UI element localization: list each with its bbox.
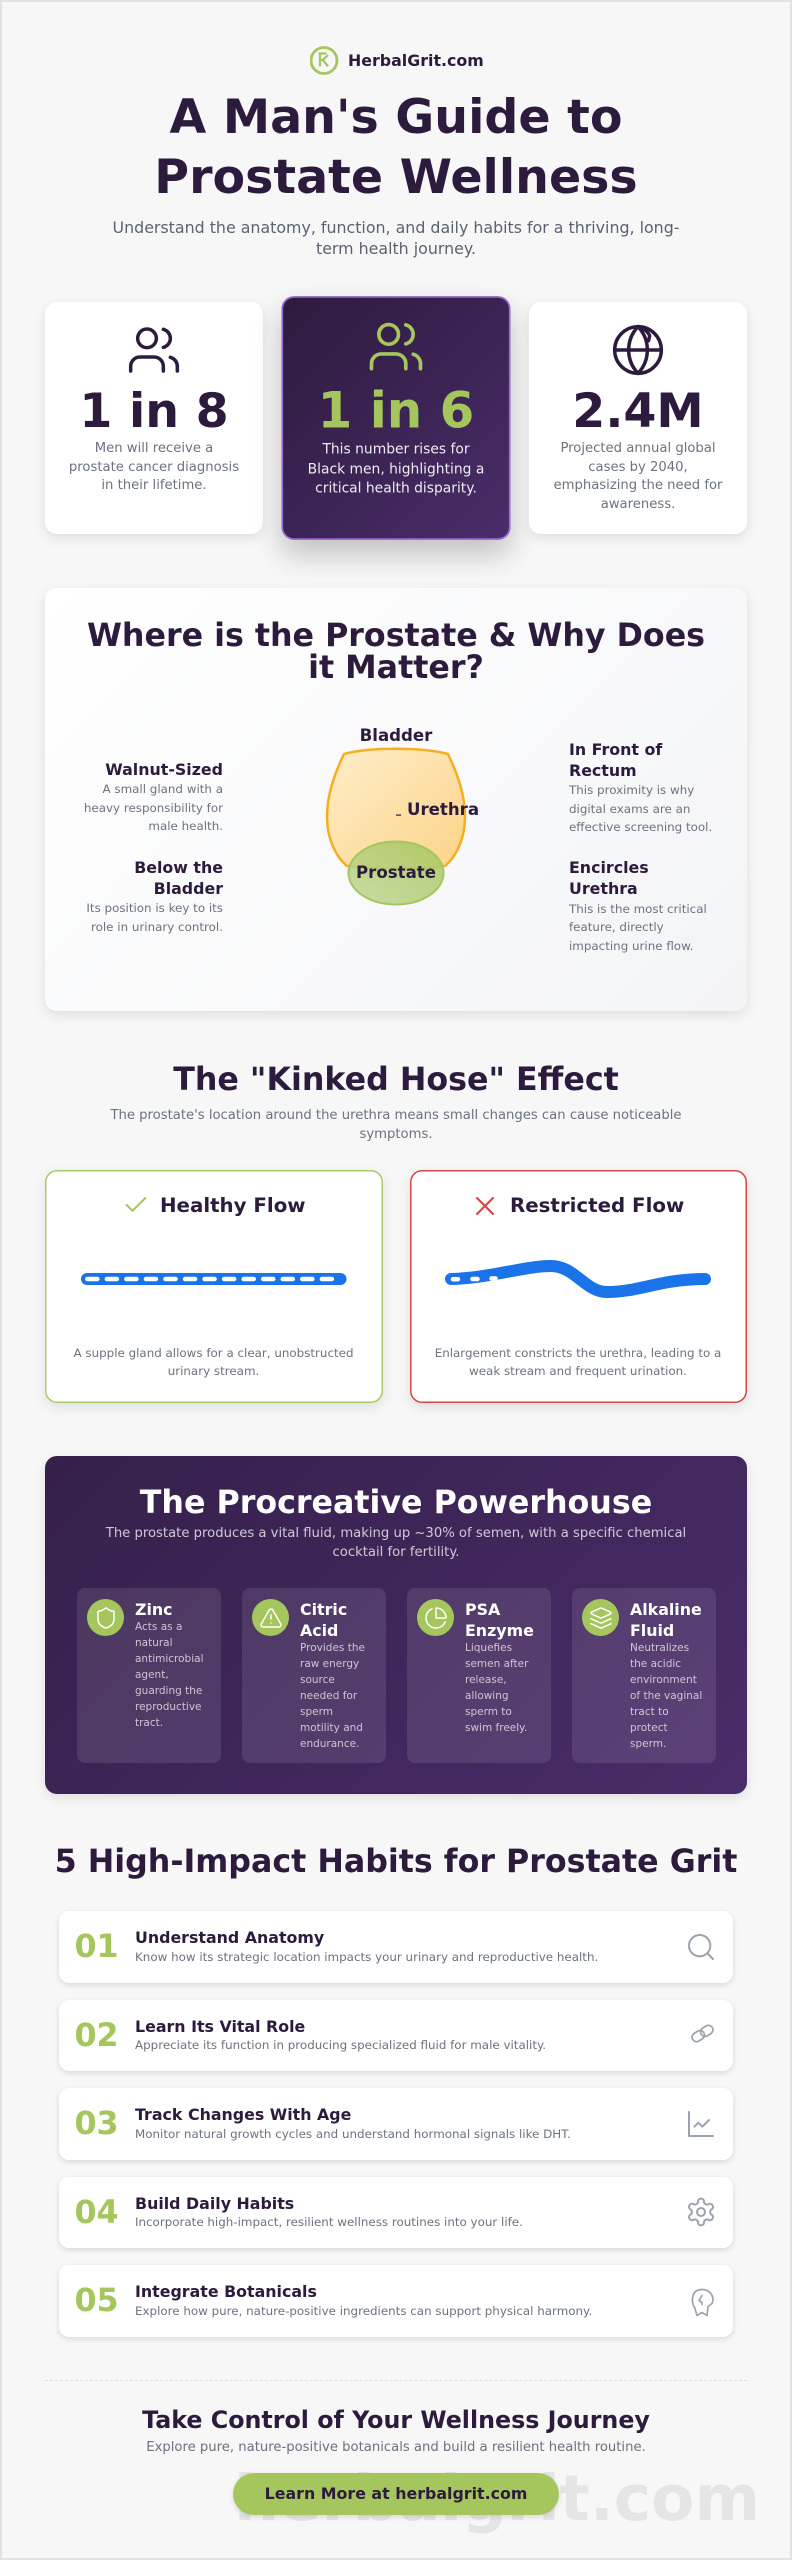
card text: source — [300, 1674, 335, 1686]
icon: users — [370, 322, 422, 370]
card title: Alkaline — [630, 1600, 702, 1619]
kinked flow line — [445, 1260, 711, 1298]
heading — [87, 618, 705, 686]
stat description: This number rises for — [322, 442, 470, 458]
card title: Citric — [300, 1600, 347, 1619]
icon: head — [692, 2288, 714, 2316]
card text: tract. — [135, 1717, 163, 1729]
subtitle: cocktail for fertility. — [333, 1545, 459, 1560]
fact: encircles urethra — [568, 858, 707, 953]
subtitle — [106, 1526, 686, 1560]
stat number: 1 in 8 — [79, 384, 229, 439]
flow line — [81, 1273, 346, 1285]
card text: motility and — [300, 1722, 363, 1734]
panel: healthy flow — [45, 1170, 382, 1403]
card text: the acidic — [630, 1658, 681, 1670]
button: Learn More at herbalgrit.com — [265, 2484, 527, 2503]
habit text: Monitor natural growth cycles and understand hormonal signals like DHT. — [135, 2127, 571, 2141]
number: 02 — [74, 2018, 119, 2054]
card text: Provides the — [300, 1642, 365, 1654]
card text: raw energy — [300, 1658, 359, 1670]
stat card: 2.4M — [529, 302, 747, 534]
habit text: Explore how pure, nature-positive ingredients can support physical harmony. — [135, 2304, 592, 2318]
panel: restricted flow — [410, 1170, 747, 1403]
number: 03 — [74, 2106, 119, 2142]
habit 05 — [59, 2265, 733, 2336]
fact: in front of rectum: In Front of — [569, 740, 662, 759]
habit text: Incorporate high-impact, resilient wellness routines into your life. — [135, 2215, 523, 2229]
habit text: Appreciate its function in producing specialized fluid for male vitality. — [135, 2038, 546, 2052]
card: citric acid — [242, 1588, 386, 1763]
label: prostate: Prostate — [356, 863, 436, 882]
stat description: awareness. — [601, 497, 675, 512]
stat card: 1 in 8 — [45, 302, 263, 534]
number: 05 — [74, 2283, 119, 2319]
stat number: 1 in 6 — [318, 382, 474, 440]
logo — [310, 46, 484, 75]
stat description: prostate cancer diagnosis — [69, 460, 239, 475]
stat description: emphasizing the need for — [554, 478, 722, 493]
title: Prostate Wellness — [154, 150, 638, 205]
fact: in front of rectum — [568, 740, 712, 834]
icon: HerbalGrit mark — [310, 46, 338, 75]
icon: line chart — [688, 2111, 714, 2137]
title — [154, 90, 638, 205]
card: psa enzyme — [406, 1588, 550, 1763]
stat number: 2.4M — [572, 384, 704, 439]
icon: search — [688, 1934, 714, 1960]
panel: where is the prostate — [45, 588, 747, 1011]
stat description: Black men, highlighting a — [308, 462, 484, 478]
stat description: critical health disparity. — [315, 481, 477, 497]
stat description — [554, 441, 722, 512]
habit title: Integrate Botanicals — [135, 2282, 317, 2301]
description — [435, 1346, 721, 1378]
stat description — [308, 442, 484, 497]
heading: The Procreative Powerhouse — [140, 1485, 652, 1521]
call to action text: Explore pure, nature-positive botanicals and build a resilient health routine. — [146, 2440, 646, 2455]
card: zinc — [76, 1588, 220, 1763]
stat description: cases by 2040, — [588, 460, 688, 475]
fact: below the bladder: Bladder — [154, 879, 223, 898]
fact text — [568, 902, 707, 953]
description: urinary stream. — [168, 1364, 259, 1378]
card text: Acts as a — [135, 1621, 182, 1633]
card text: tract to — [630, 1706, 669, 1718]
icon: users — [128, 327, 180, 373]
fact text: impacting urine flow. — [569, 939, 693, 953]
habit title: Track Changes With Age — [135, 2105, 351, 2124]
icon: gear — [688, 2198, 714, 2226]
card text: swim freely. — [465, 1722, 527, 1734]
icon: linked pills — [691, 2024, 714, 2043]
card title: Acid — [300, 1621, 338, 1640]
subtitle: Understand the anatomy, function, and daily habits for a thriving, long- — [113, 218, 679, 237]
button — [233, 2473, 559, 2515]
label: urethra: Urethra — [407, 800, 479, 819]
fact text: male health. — [148, 819, 223, 833]
kinked hose subtitle: symptoms. — [359, 1127, 433, 1142]
card text: reproductive — [135, 1701, 202, 1713]
card text: guarding the — [135, 1685, 202, 1697]
description: A supple gland allows for a clear, unobstructed — [74, 1346, 353, 1360]
fact text — [84, 782, 223, 833]
icon: triangle alert — [252, 1599, 289, 1636]
description — [74, 1346, 353, 1378]
habit title: Learn Its Vital Role — [135, 2016, 305, 2036]
fact text: feature, directly — [569, 920, 664, 934]
card text — [465, 1642, 528, 1734]
title: A Man's Guide to — [170, 90, 622, 145]
card text — [135, 1621, 204, 1729]
heading: Where is the Prostate & Why Does — [87, 618, 705, 654]
card title: Enzyme — [465, 1621, 534, 1640]
card text: needed for — [300, 1690, 357, 1702]
card text: semen after — [465, 1658, 528, 1670]
heading: it Matter? — [308, 650, 484, 686]
icon: globe — [612, 324, 664, 376]
fact: encircles urethra: Urethra — [569, 879, 638, 898]
card text: release, — [465, 1674, 507, 1686]
icon: check — [126, 1197, 146, 1212]
card title — [630, 1600, 702, 1640]
stat description: Men will receive a — [95, 441, 213, 456]
card text: Neutralizes — [630, 1642, 689, 1654]
habit 02 — [59, 2000, 733, 2071]
habit text: Know how its strategic location impacts your urinary and reproductive health. — [135, 1950, 598, 1964]
stat description: Projected annual global — [560, 441, 716, 456]
heading: Healthy Flow — [160, 1194, 306, 1217]
fact text: effective screening tool. — [569, 820, 712, 834]
card title: Fluid — [630, 1621, 674, 1640]
card text: allowing — [465, 1690, 509, 1702]
fact text — [86, 901, 223, 934]
icon: x — [476, 1196, 494, 1216]
fact text: A small gland with a — [102, 782, 223, 796]
fact text: role in urinary control. — [91, 920, 223, 934]
panel: procreative powerhouse — [45, 1456, 747, 1794]
card title — [465, 1600, 534, 1640]
icon: pie chart — [417, 1599, 454, 1636]
habit 03 — [59, 2088, 733, 2160]
description: weak stream and frequent urination. — [469, 1364, 687, 1378]
icon: shield — [87, 1599, 124, 1636]
card text: sperm. — [630, 1738, 666, 1750]
subtitle: term health journey. — [316, 239, 476, 258]
card text: antimicrobial — [135, 1653, 204, 1665]
brand name: HerbalGrit.com — [348, 51, 484, 70]
card text: of the vaginal — [630, 1690, 702, 1702]
fact text: This is the most critical — [569, 902, 707, 916]
heading: Restricted Flow — [510, 1194, 684, 1217]
card text: environment — [630, 1674, 697, 1686]
card text — [630, 1642, 702, 1750]
stat card: 1 in 6 highlighted — [282, 296, 510, 540]
card title — [300, 1600, 347, 1640]
kinked hose subtitle — [110, 1108, 682, 1142]
heading: kinked hose: The "Kinked Hose" Effect — [173, 1062, 619, 1098]
label: bladder: Bladder — [360, 726, 432, 745]
icon: layers — [582, 1599, 619, 1636]
fact: encircles urethra: Encircles — [569, 858, 649, 877]
fact text: heavy responsibility for — [84, 801, 223, 815]
card text: Liquefies — [465, 1642, 512, 1654]
card text: sperm to — [465, 1706, 512, 1718]
heading: habits: 5 High-Impact Habits for Prostate Grit — [55, 1844, 737, 1880]
fact: walnut-sized: Walnut-Sized — [105, 760, 223, 779]
card text: protect — [630, 1722, 668, 1734]
number: 01 — [74, 1929, 119, 1965]
card text — [300, 1642, 365, 1750]
fact: walnut-sized — [84, 760, 223, 833]
card text: endurance. — [300, 1738, 359, 1750]
kinked hose subtitle: The prostate's location around the urethra means small changes can cause noticeable — [110, 1108, 682, 1123]
habit title: Understand Anatomy — [135, 1928, 324, 1947]
subtitle: The prostate produces a vital fluid, making up ~30% of semen, with a specific chemical — [106, 1526, 686, 1541]
watermark: herbalgrit.com — [234, 2462, 760, 2535]
fact: below the bladder — [86, 858, 223, 934]
habit 01 — [59, 1911, 733, 1982]
habit 04 — [59, 2176, 733, 2248]
stat description — [69, 441, 239, 493]
diagram: bladder and prostate — [326, 726, 479, 906]
card text: natural — [135, 1637, 173, 1649]
description: Enlargement constricts the urethra, leading to a — [435, 1346, 721, 1360]
card title: Zinc — [135, 1600, 173, 1619]
habit title: Build Daily Habits — [135, 2194, 294, 2212]
stat description: in their lifetime. — [101, 478, 207, 493]
fact text: Its position is key to its — [86, 901, 223, 915]
subtitle — [113, 218, 679, 258]
card: alkaline fluid — [572, 1588, 716, 1763]
fact: below the bladder: Below the — [134, 858, 223, 877]
card text: sperm — [300, 1706, 333, 1718]
number: 04 — [74, 2194, 119, 2230]
fact text: digital exams are an — [569, 802, 690, 816]
card text: agent, — [135, 1669, 169, 1681]
card title: PSA — [465, 1600, 500, 1619]
fact text — [568, 783, 712, 834]
heading: call to action: Take Control of Your Wellness Journey — [142, 2406, 650, 2434]
fact text: This proximity is why — [569, 783, 694, 797]
fact: in front of rectum: Rectum — [569, 761, 637, 780]
